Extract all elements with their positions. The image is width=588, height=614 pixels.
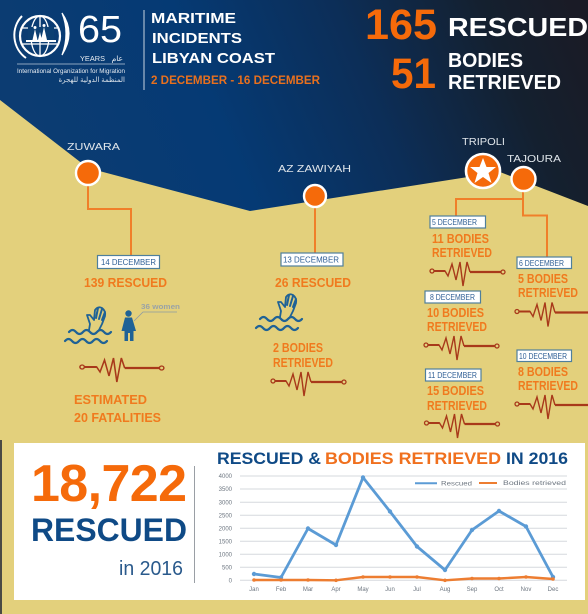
logo: IOM 65 years	[14, 9, 125, 84]
line chart: rescued and bodies retrieved by month: 1500	[219, 540, 233, 546]
line chart: rescued and bodies retrieved by month: 4000	[219, 474, 233, 480]
line chart: rescued and bodies retrieved by month: 0	[229, 578, 233, 584]
incident: 14 December Zuwara: 36 women	[141, 304, 180, 311]
location: Tajoura: TAJOURA	[507, 153, 561, 165]
chart title: IN 2016	[506, 449, 568, 468]
date range: 2 DECEMBER - 16 DECEMBER	[151, 75, 321, 87]
incident: 14 December Zuwara	[65, 256, 180, 425]
line chart: rescued and bodies retrieved by month: 3000	[219, 500, 233, 506]
stat: 18,722 rescued in 2016: RESCUED	[31, 512, 187, 548]
headline stat: 51 bodies retrieved: BODIES	[448, 50, 523, 72]
chart title: RESCUED &	[217, 449, 321, 468]
location: Tajoura	[507, 153, 561, 191]
headline stat: 165 rescued: RESCUED	[448, 12, 588, 42]
line chart: rescued and bodies retrieved by month: Jul	[413, 587, 421, 593]
line chart: rescued and bodies retrieved by month: Sep	[467, 587, 478, 593]
line chart: rescued and bodies retrieved by month: 2500	[219, 514, 233, 520]
incident: 5 December Tripoli: 5 DECEMBER	[432, 218, 477, 227]
chart title	[217, 449, 568, 468]
headline stat: 165 rescued	[365, 1, 588, 49]
incident: 14 December Zuwara: 20 FATALITIES	[74, 411, 161, 425]
logo: IOM 65 years: YEARS	[80, 54, 105, 63]
incident: 6 December Tajoura: 6 DECEMBER	[519, 259, 564, 268]
location: Tripoli: TRIPOLI	[462, 136, 505, 148]
line chart: rescued and bodies retrieved by month: 500	[222, 566, 233, 572]
logo: IOM 65 years: International Organization for Migration	[17, 69, 125, 75]
location: Tripoli	[462, 136, 505, 188]
divider: summary rule	[194, 466, 195, 583]
incident: 11 December Tripoli: RETRIEVED	[427, 399, 487, 413]
incident: 13 December Az Zawiyah: 13 DECEMBER	[283, 256, 339, 264]
line chart: rescued and bodies retrieved by month: Dec	[548, 587, 558, 593]
location: Zuwara	[67, 141, 131, 255]
chart title: BODIES RETRIEVED	[325, 449, 501, 468]
incident: 6 December Tajoura	[515, 257, 588, 326]
headline stat: 51 bodies retrieved: RETRIEVED	[448, 72, 561, 94]
line chart: rescued and bodies retrieved by month: Oct	[494, 587, 504, 593]
line chart: rescued and bodies retrieved by month: Jun	[385, 587, 395, 593]
incident: 5 December Tripoli: 11 BODIES	[432, 232, 489, 246]
incident: 11 December Tripoli: 11 DECEMBER	[428, 371, 477, 380]
heading: maritime incidents	[151, 10, 275, 67]
incident: 11 December Tripoli	[424, 369, 500, 438]
divider: header rule	[144, 10, 145, 90]
line chart: rescued and bodies retrieved by month: 2000	[219, 526, 233, 532]
line chart: rescued and bodies retrieved by month: 1000	[219, 552, 233, 558]
logo: IOM 65 years: المنظمة الدولية للهجرة	[58, 77, 125, 84]
location: Zuwara: ZUWARA	[67, 141, 120, 153]
incident: 14 December Zuwara: 14 DECEMBER	[101, 258, 156, 267]
panel: 2016 summary	[14, 443, 585, 600]
heading: maritime incidents: MARITIME	[151, 10, 236, 27]
line chart: rescued and bodies retrieved by month: May	[357, 587, 369, 593]
incident: 10 December Tajoura: 10 DECEMBER	[519, 352, 567, 361]
incident: 5 December Tripoli	[430, 216, 505, 286]
headline stat: 51 bodies retrieved: 51	[391, 50, 436, 98]
incident: 10 December Tajoura: 8 BODIES	[518, 365, 568, 379]
incident: 13 December Az Zawiyah: 26 RESCUED	[275, 276, 351, 290]
stat: 18,722 rescued in 2016: in 2016	[119, 558, 183, 580]
incident: 10 December Tajoura	[515, 350, 588, 419]
line chart: rescued and bodies retrieved by month	[219, 474, 567, 593]
logo: IOM 65 years: عام	[112, 54, 123, 63]
incident: 5 December Tripoli: RETRIEVED	[432, 246, 492, 260]
incident: 8 December Tripoli	[424, 291, 499, 360]
chart legend: Rescued	[441, 482, 472, 488]
incident: 8 December Tripoli: 8 DECEMBER	[430, 293, 475, 302]
incident: 11 December Tripoli: 15 BODIES	[427, 384, 484, 398]
line chart: rescued and bodies retrieved by month: Apr	[331, 587, 341, 593]
line chart: rescued and bodies retrieved by month: Nov	[521, 587, 531, 593]
headline stat: 51 bodies retrieved	[391, 50, 561, 98]
heading: maritime incidents: LIBYAN COAST	[152, 50, 275, 67]
location: Az Zawiyah	[278, 163, 351, 253]
incident: 13 December Az Zawiyah: RETRIEVED	[273, 356, 333, 370]
headline stat: 165 rescued: 165	[365, 1, 437, 49]
incident: 6 December Tajoura: RETRIEVED	[518, 286, 578, 300]
incident: 14 December Zuwara: ESTIMATED	[74, 393, 147, 407]
location: Az Zawiyah: AZ ZAWIYAH	[278, 163, 351, 175]
logo: IOM 65 years: 65	[78, 9, 122, 51]
incident: 13 December Az Zawiyah: 2 BODIES	[273, 341, 323, 355]
incident: 8 December Tripoli: 10 BODIES	[427, 306, 484, 320]
incident: 8 December Tripoli: RETRIEVED	[427, 320, 487, 334]
stat: 18,722 rescued in 2016	[31, 455, 187, 580]
left edge strip	[0, 440, 2, 614]
incident: 14 December Zuwara: 139 RESCUED	[84, 276, 167, 290]
connector lines: Tajoura and Tripoli incidents	[456, 190, 547, 257]
chart legend	[415, 481, 566, 488]
incident: 13 December Az Zawiyah	[256, 253, 351, 396]
chart legend: Bodies retrieved	[503, 481, 566, 487]
stat: 18,722 rescued in 2016: 18,722	[31, 455, 187, 513]
line chart: rescued and bodies retrieved by month: Feb	[276, 587, 287, 593]
line chart: rescued and bodies retrieved by month: Aug	[440, 587, 450, 593]
incident: 6 December Tajoura: 5 BODIES	[518, 272, 568, 286]
line chart: rescued and bodies retrieved by month: Mar	[303, 587, 313, 593]
heading: maritime incidents: INCIDENTS	[152, 30, 242, 47]
line chart: rescued and bodies retrieved by month: Jan	[249, 587, 259, 593]
line chart: rescued and bodies retrieved by month: 3500	[219, 487, 233, 493]
incident: 10 December Tajoura: RETRIEVED	[518, 379, 578, 393]
